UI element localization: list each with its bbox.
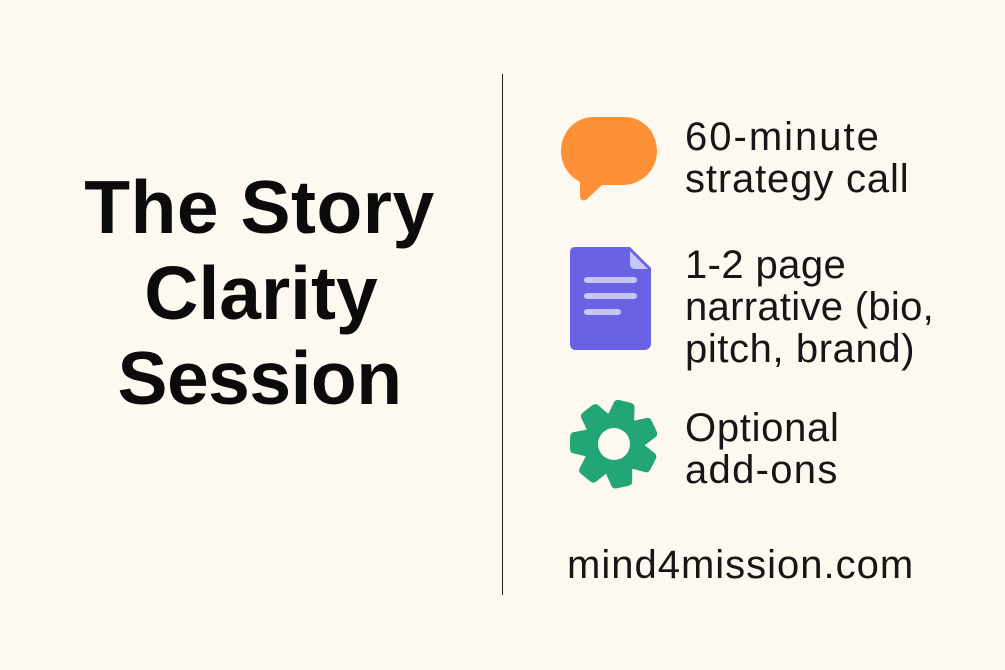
title: Session (117, 336, 402, 420)
title: The Story (84, 165, 435, 249)
text: add-ons: add-ons (685, 448, 839, 492)
text: narrative: 1-2 page (685, 243, 846, 287)
title: Clarity (144, 250, 378, 334)
text: narrative: narrative (bio, (685, 285, 934, 329)
text: strategy call: strategy call (685, 157, 909, 201)
text: narrative: pitch, brand) (685, 327, 915, 371)
title (84, 165, 435, 420)
text: website: mind4mission.com (567, 543, 914, 587)
text: narrative (685, 243, 934, 371)
vertical divider (502, 74, 503, 595)
text: strategy call: 60-minute (685, 115, 881, 159)
text: strategy call (685, 115, 909, 201)
text: add-ons (685, 406, 840, 492)
text: add-ons: Optional (685, 406, 840, 450)
